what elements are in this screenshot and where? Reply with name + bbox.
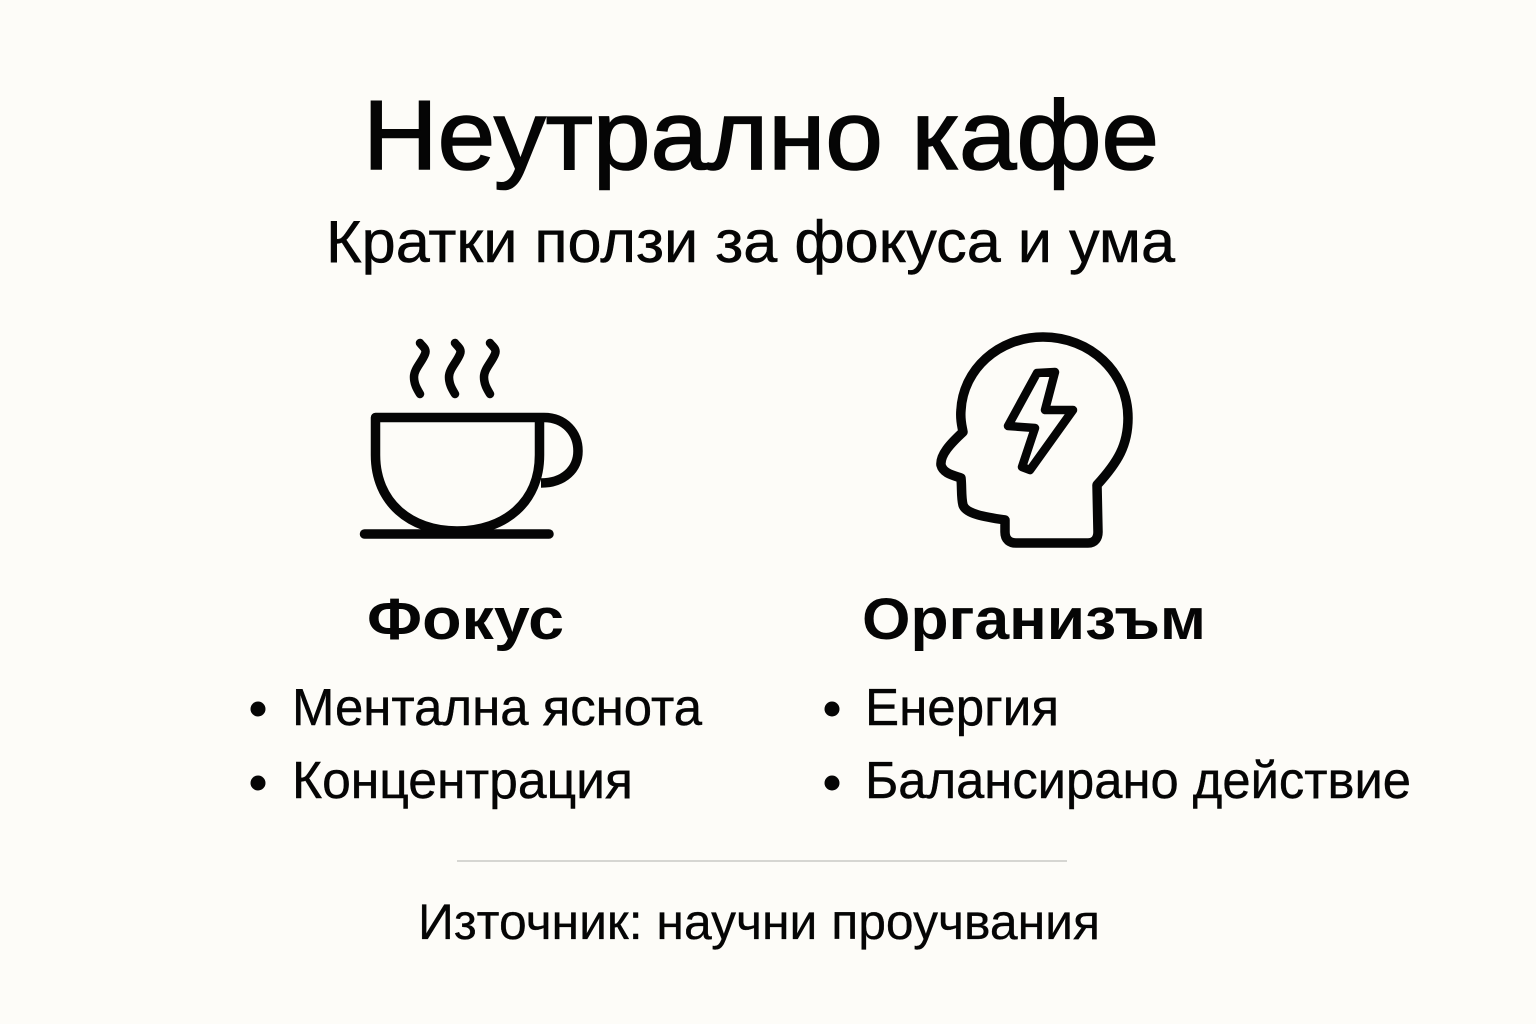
panel: organism: [824, 337, 1411, 810]
heading: organism: Организъм: [862, 587, 1206, 652]
icon: steaming coffee cup: [364, 343, 578, 534]
icon: head with lightning bolt: [941, 337, 1128, 543]
list: organism benefits: [824, 679, 1411, 810]
list: focus benefits: [250, 679, 702, 810]
list: focus benefits: Ментална яснота: [292, 679, 702, 737]
title: Неутрално кафе: [363, 80, 1159, 190]
subtitle: Кратки ползи за фокуса и ума: [326, 209, 1175, 275]
list: organism benefits: Енергия: [865, 679, 1059, 737]
list: focus benefits: Концентрация: [292, 752, 633, 810]
list: organism benefits: Балансирано действие: [865, 752, 1411, 810]
panel: focus: [250, 343, 702, 810]
source note: Източник: научни проучвания: [418, 894, 1100, 950]
heading: focus: Фокус: [367, 587, 564, 652]
